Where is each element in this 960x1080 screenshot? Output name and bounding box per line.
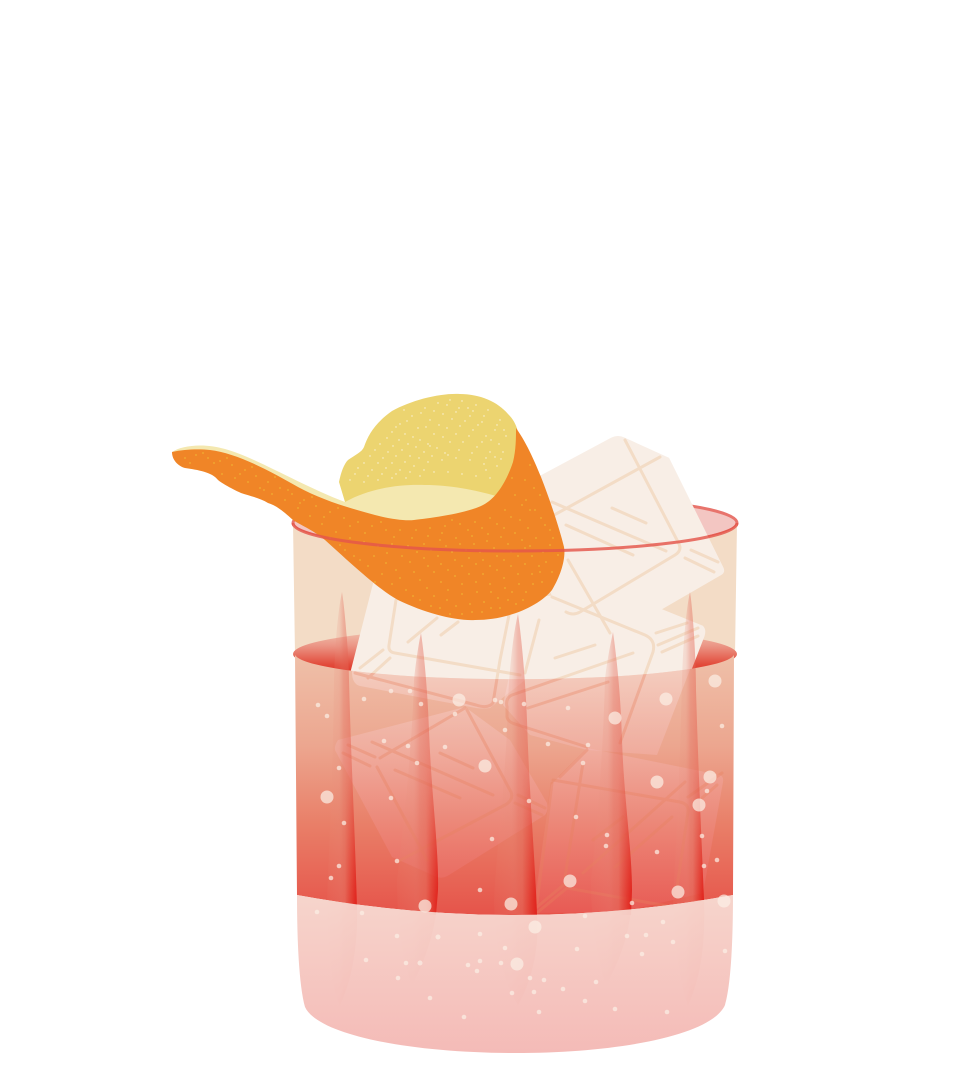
ice cubes seen through liquid — [335, 669, 724, 914]
glass rim back — [293, 495, 737, 551]
peel pith: pale edge — [172, 445, 496, 530]
liquid body — [295, 655, 734, 915]
condensation streaks — [334, 592, 704, 915]
glass rim front — [293, 523, 737, 551]
liquid surface — [293, 627, 737, 681]
peel pith: yellow inner — [339, 394, 530, 510]
orange zest — [172, 428, 564, 620]
glass base — [297, 895, 733, 1053]
yellow pores on zest — [185, 453, 558, 614]
glass upper body — [293, 523, 737, 655]
orange peel garnish — [172, 394, 564, 620]
ice cubes above liquid — [335, 438, 723, 913]
illustration: cocktail glass with ice and orange peel — [172, 394, 738, 1053]
bubbles — [315, 674, 730, 1019]
white pores on pith — [350, 400, 506, 482]
